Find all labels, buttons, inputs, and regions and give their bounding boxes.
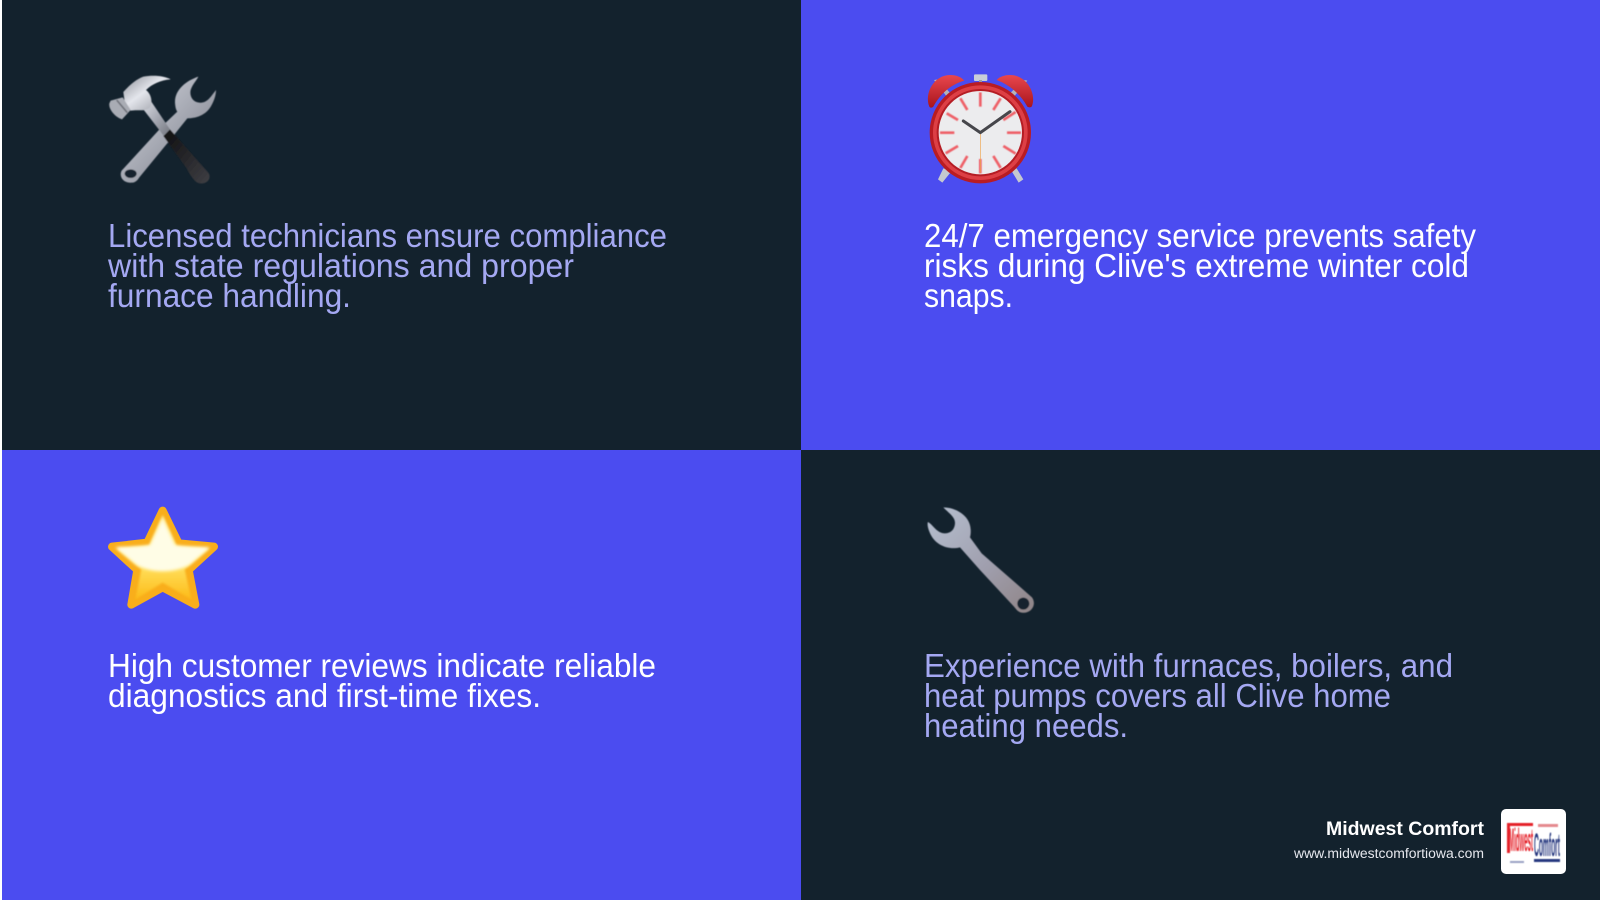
logo (1501, 809, 1566, 874)
brand name: Midwest Comfort (1326, 819, 1485, 840)
text: experience: heating needs. (924, 707, 1128, 744)
panel: emergency service (801, 0, 1600, 450)
text: licensed technicians: Licensed technicians ensure compliance (108, 217, 667, 254)
icon: star (112, 511, 214, 605)
icon: wrench (928, 507, 1034, 613)
panel: licensed technicians (2, 0, 801, 450)
text: licensed technicians (107, 217, 667, 314)
panel: experience (801, 450, 1600, 900)
text: customer reviews: diagnostics and first-time fixes. (108, 677, 541, 714)
website url: www.midwestcomfortiowa.com (1293, 846, 1484, 861)
text: experience (924, 647, 1453, 744)
text: emergency service (924, 217, 1476, 314)
text: emergency service: risks during Clive's extreme winter cold (924, 247, 1469, 284)
text: licensed technicians: with state regulations and proper (107, 247, 574, 284)
text: emergency service: 24/7 emergency service prevents safety (924, 217, 1476, 254)
text: experience: heat pumps covers all Clive home (924, 677, 1391, 714)
text: experience: Experience with furnaces, boilers, and (924, 647, 1453, 684)
icon: hammer and wrench (109, 76, 216, 184)
text: customer reviews: High customer reviews indicate reliable (108, 647, 656, 684)
text: customer reviews (108, 647, 656, 714)
icon: alarm clock (928, 74, 1033, 183)
brand footer (1293, 809, 1566, 874)
text: licensed technicians: furnace handling. (108, 277, 351, 314)
text: emergency service: snaps. (924, 277, 1013, 314)
panel: customer reviews (2, 450, 801, 900)
